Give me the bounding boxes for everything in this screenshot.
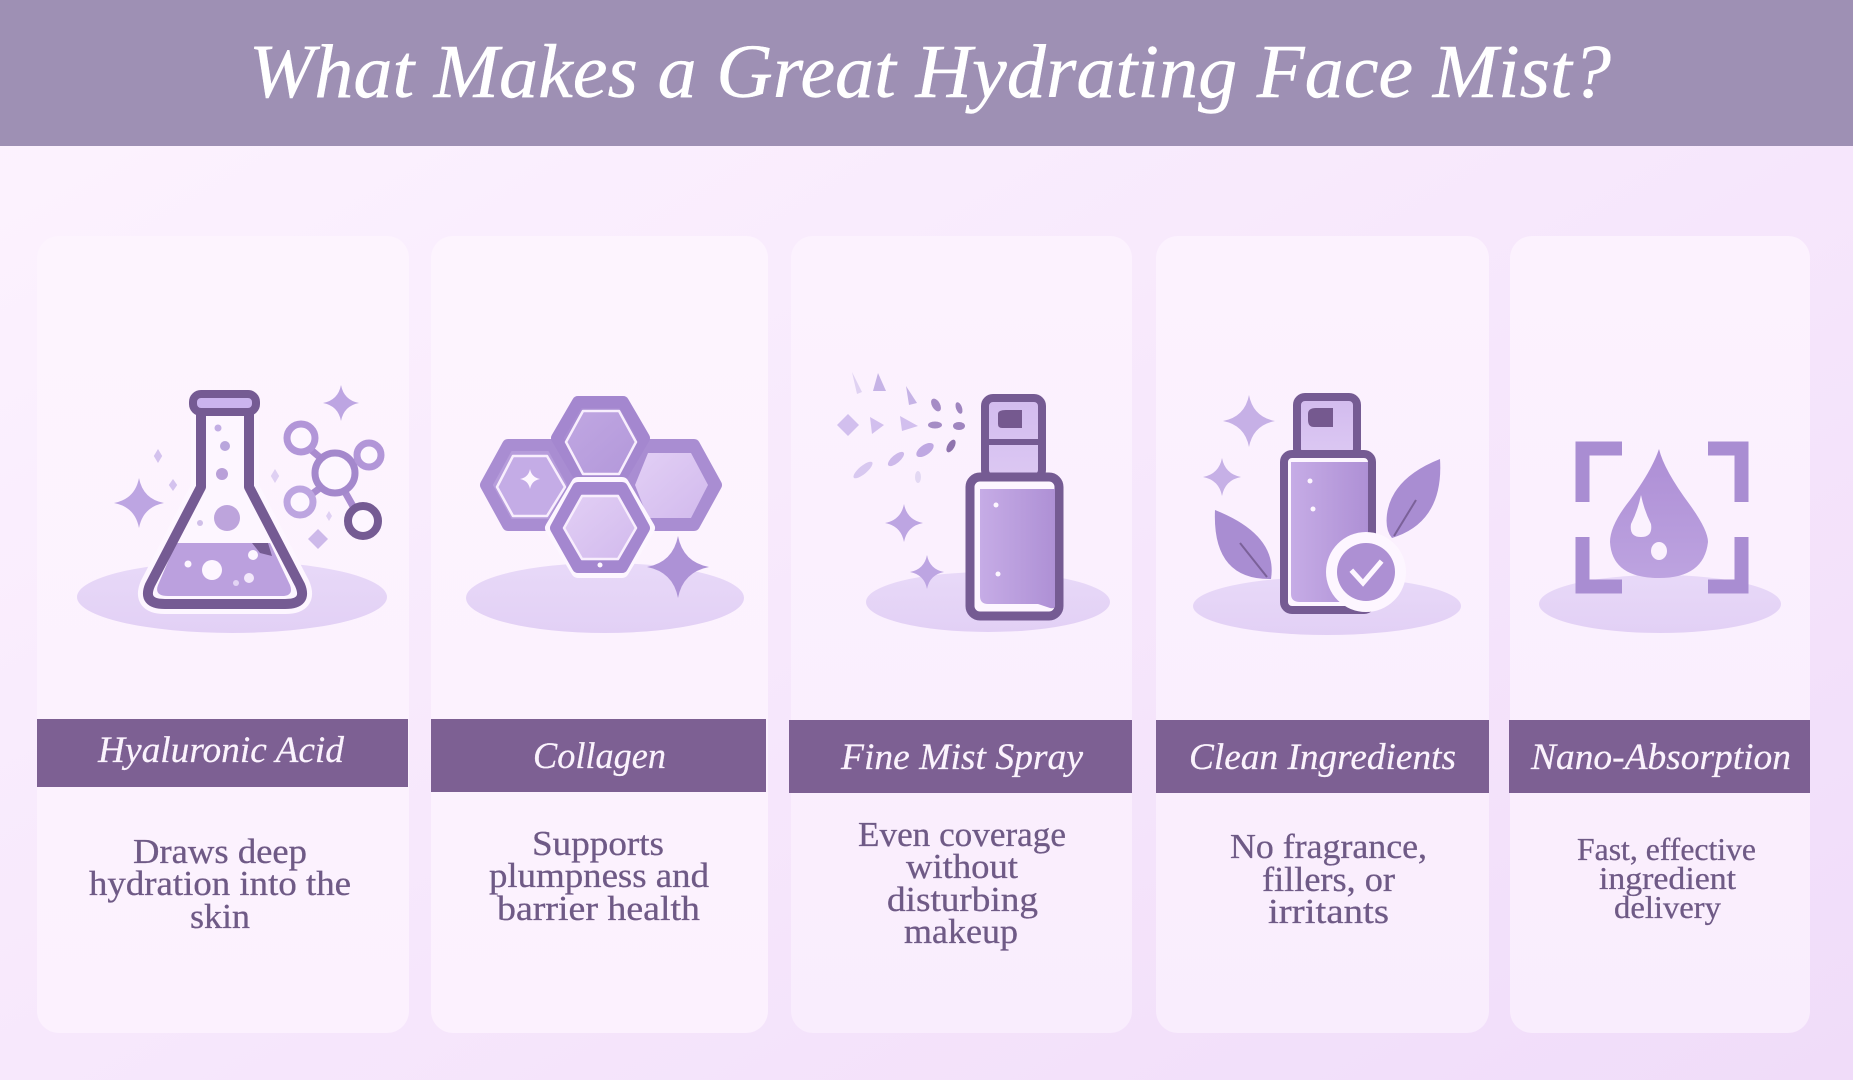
title: What Makes a Great Hydrating Face Mist?: [249, 30, 1611, 114]
label bar: Fine Mist Spray: [789, 720, 1132, 793]
label bar: Clean Ingredients: Clean Ingredients: [1189, 737, 1456, 778]
label bar: Nano-Absorption: [1509, 720, 1810, 793]
water drop: [1610, 449, 1708, 578]
bottle: [1284, 397, 1372, 610]
description: Clean Ingredients: [1230, 827, 1427, 931]
description: Hyaluronic Acid: skin: [190, 897, 250, 936]
description: Hyaluronic Acid: Draws deep: [133, 832, 307, 871]
label bar: Collagen: [431, 719, 766, 792]
description: Fine Mist Spray: Even coverage: [858, 815, 1066, 854]
label bar: Fine Mist Spray: Fine Mist Spray: [840, 737, 1084, 778]
icon: clean bottle with leaves and check: [1193, 395, 1461, 635]
label bar: Hyaluronic Acid: [37, 719, 408, 787]
panel: Fine Mist Spray: [789, 236, 1132, 1033]
panel: Collagen: [431, 236, 768, 1033]
label bar: Hyaluronic Acid: Hyaluronic Acid: [97, 730, 344, 771]
description: Collagen: Supports: [532, 824, 664, 863]
description: Nano-Absorption: ingredient: [1599, 860, 1736, 896]
check badge: [1326, 532, 1406, 612]
brackets: [1582, 448, 1742, 586]
description: Fine Mist Spray: disturbing: [887, 880, 1038, 919]
description: Clean Ingredients: fillers, or: [1262, 860, 1395, 899]
description: Clean Ingredients: irritants: [1268, 892, 1389, 931]
label bar: Clean Ingredients: [1156, 720, 1489, 793]
icon: collagen hexagons: [466, 402, 744, 633]
panel: Hyaluronic Acid: [37, 236, 409, 1033]
leaf left: [1215, 510, 1272, 579]
description: Collagen: barrier health: [497, 889, 701, 928]
bottle: [970, 398, 1059, 616]
panel: Nano-Absorption: [1509, 236, 1810, 1033]
description: Fine Mist Spray: [858, 815, 1066, 951]
description: Fine Mist Spray: makeup: [904, 912, 1018, 951]
description: Nano-Absorption: [1577, 831, 1756, 925]
flask: [148, 394, 302, 604]
description: Hyaluronic Acid: [89, 832, 351, 936]
panel: Clean Ingredients: [1156, 236, 1489, 1033]
description: Hyaluronic Acid: hydration into the: [89, 864, 351, 903]
icon: spray bottle: [837, 372, 1110, 632]
description: Clean Ingredients: No fragrance,: [1230, 827, 1427, 866]
description: Collagen: [489, 824, 710, 928]
description: Nano-Absorption: Fast, effective: [1577, 831, 1756, 867]
molecule: [287, 424, 381, 536]
spray particles: [837, 372, 965, 483]
description: Fine Mist Spray: without: [906, 847, 1018, 886]
description: Collagen: plumpness and: [489, 856, 710, 895]
label bar: Collagen: Collagen: [533, 736, 666, 777]
leaf right: [1387, 459, 1440, 538]
description: Nano-Absorption: delivery: [1614, 889, 1721, 925]
label bar: Nano-Absorption: Nano-Absorption: [1530, 737, 1791, 778]
header banner: [0, 0, 1853, 146]
icon: flask with molecule: [77, 385, 387, 633]
icon: drop in brackets: [1539, 448, 1781, 633]
